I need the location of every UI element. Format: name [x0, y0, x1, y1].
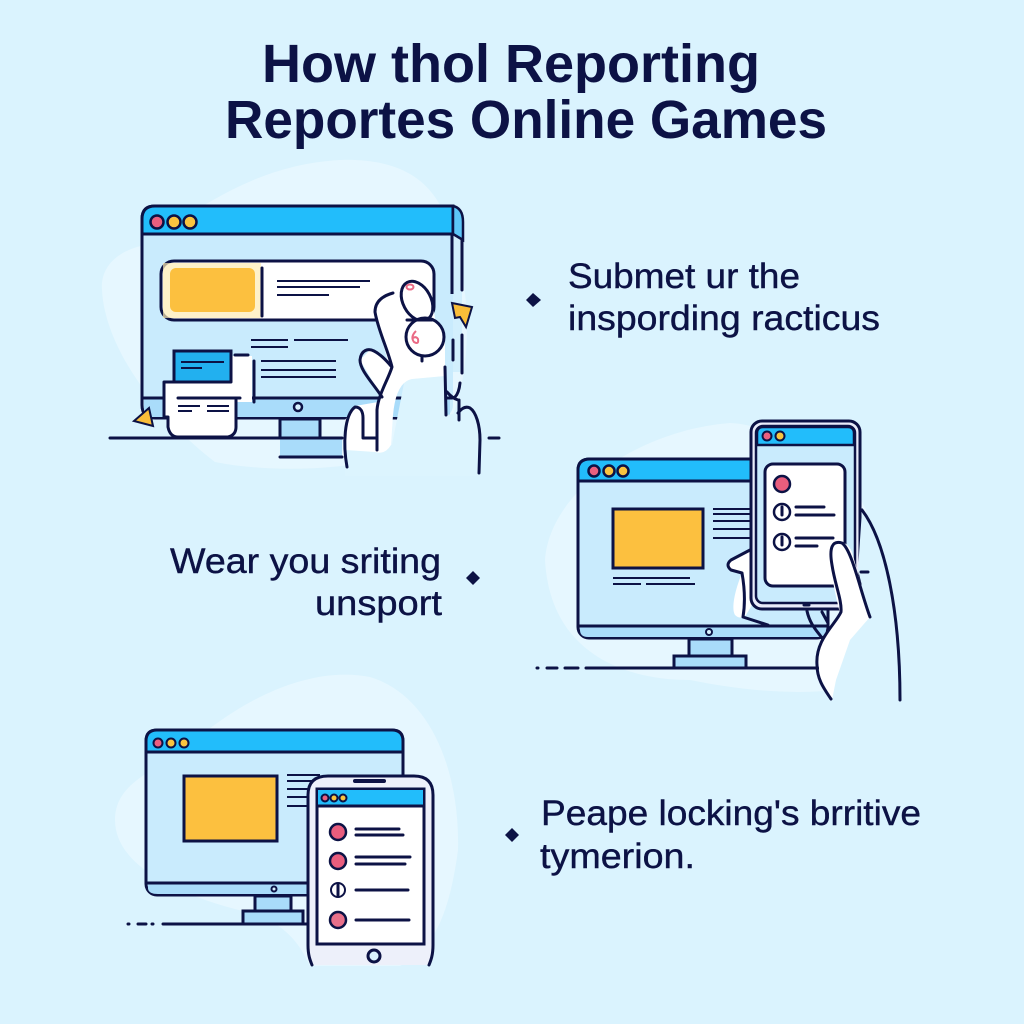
illustration: desktop browser and tablet: [115, 675, 458, 966]
background blob 3: [115, 675, 458, 966]
step 3 text: tymerion.: [540, 837, 695, 876]
content card: [161, 261, 434, 320]
hand: [345, 276, 499, 476]
background blob 1: [102, 160, 467, 469]
step 3 text: Peape locking's brritive: [541, 794, 921, 833]
page text lines: [251, 340, 348, 377]
step 2 text: Wear you sriting: [170, 542, 441, 581]
step 2 text: [170, 542, 480, 623]
title: How thol Reporting: [262, 34, 760, 94]
step 3 text: [505, 794, 921, 876]
step 2 text: unsport: [315, 584, 442, 623]
phone: [751, 421, 860, 609]
hand front: [807, 510, 900, 700]
printer: [164, 351, 254, 437]
step 1 text: Submet ur the: [568, 257, 800, 296]
tablet: [308, 776, 433, 965]
title: [225, 34, 827, 150]
hand behind phone: [728, 550, 768, 625]
arrow: cursor left: [134, 408, 153, 426]
illustration: desktop browser with hand: [102, 160, 499, 476]
background blob 2: [545, 423, 868, 692]
illustration: desktop browser and phone in hand: [537, 421, 900, 700]
step 1 text: [526, 257, 880, 338]
monitor 3: [128, 730, 403, 924]
arrow: cursor right: [452, 303, 472, 327]
monitor 2: [537, 459, 828, 668]
title: Reportes Online Games: [225, 90, 827, 150]
step 1 text: inspording racticus: [568, 299, 880, 338]
monitor 1: [110, 206, 463, 457]
